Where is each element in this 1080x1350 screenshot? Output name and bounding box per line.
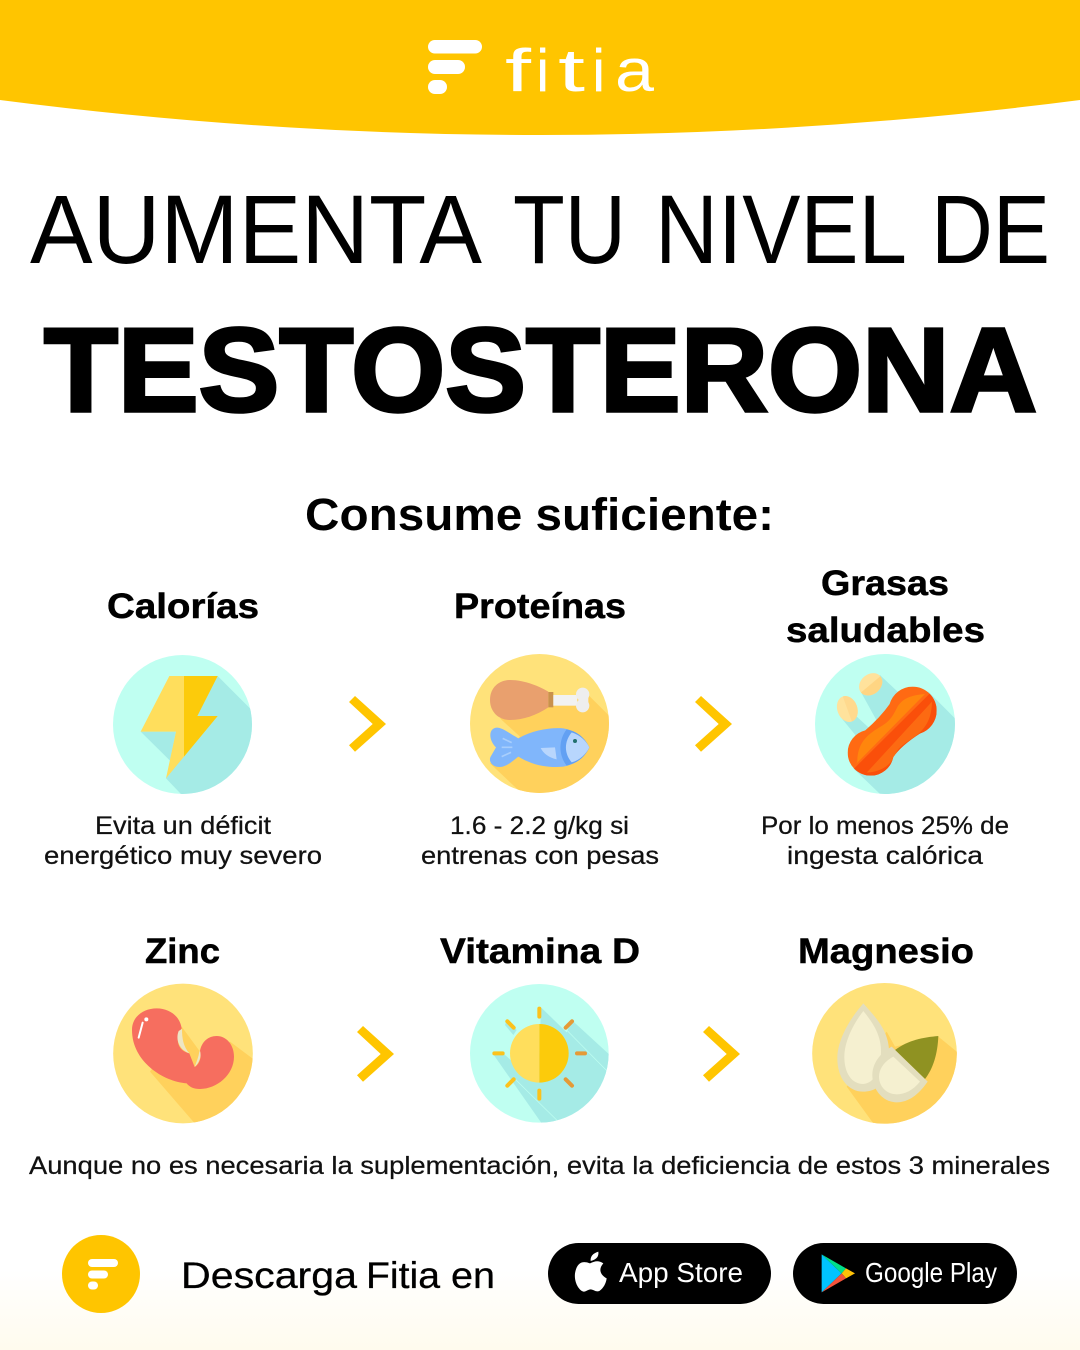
heading: vitamina d: Vitamina D	[440, 932, 640, 971]
download text: Descarga	[181, 1255, 357, 1296]
panel: grasas saludables	[761, 564, 1009, 870]
header banner	[0, 0, 1080, 135]
title line 1	[30, 175, 1050, 284]
drumstick	[490, 680, 589, 720]
heading: grasas saludables: Grasas	[821, 564, 949, 603]
logo wordmark: t	[558, 37, 586, 104]
text: calorias: energético muy severo	[44, 842, 322, 870]
icon: peanut	[815, 654, 955, 794]
title line 1: DE	[931, 175, 1050, 284]
seeds	[833, 669, 887, 725]
download text	[181, 1255, 495, 1296]
app store button	[548, 1243, 771, 1304]
heading: calorias: Calorías	[107, 587, 259, 626]
text: proteinas	[421, 812, 659, 870]
icon: lightning bolt	[113, 655, 252, 794]
note text: Aunque no es necesaria la suplementación, evita la deficiencia de estos 3 minerales	[29, 1152, 1050, 1180]
icon: chicken and fish	[470, 654, 609, 793]
heading: grasas saludables	[786, 564, 985, 650]
title line 1: AUMENTA	[30, 175, 482, 284]
logo wordmark: i	[592, 37, 605, 104]
icon: fitia logo badge	[62, 1235, 140, 1313]
panel: vitamina d	[440, 932, 640, 1132]
google play button	[793, 1243, 1017, 1304]
download text: Fitia	[366, 1255, 440, 1296]
icon: sun	[470, 984, 612, 1132]
text: grasas: ingesta calórica	[787, 842, 983, 870]
panel: magnesio	[798, 932, 974, 1135]
logo wordmark: f	[505, 37, 532, 104]
title line 1: TU	[513, 175, 626, 284]
label: Google Play	[865, 1257, 997, 1288]
text: calorias: Evita un déficit	[95, 812, 271, 840]
icon: play	[822, 1254, 855, 1292]
fish	[490, 728, 589, 767]
panel: proteinas	[421, 587, 659, 870]
panel: zinc	[113, 937, 253, 1124]
text: proteinas: entrenas con pesas	[421, 842, 659, 870]
text: grasas	[761, 812, 1009, 870]
label: App Store	[619, 1257, 743, 1288]
icon: pumpkin seeds	[812, 983, 957, 1124]
arrow	[703, 1026, 740, 1082]
logo wordmark	[505, 37, 655, 104]
text: proteinas: 1.6 - 2.2 g/kg si	[450, 812, 629, 840]
logo wordmark: a	[615, 37, 655, 104]
arrow	[357, 1026, 394, 1082]
text: calorias	[44, 812, 322, 870]
logo wordmark: i	[536, 37, 549, 104]
text: grasas: Por lo menos 25% de	[761, 812, 1009, 840]
subtitle: Consume suficiente:	[305, 489, 774, 540]
panel: calorias	[44, 587, 322, 870]
icon: bean	[113, 984, 257, 1135]
heading: zinc: Zinc	[145, 932, 220, 971]
arrow	[349, 696, 386, 752]
logo mark	[428, 40, 482, 94]
download text: en	[451, 1255, 495, 1296]
heading: grasas saludables: saludables	[786, 611, 985, 650]
title line 1: NIVEL	[655, 175, 907, 284]
arrow	[695, 696, 732, 752]
heading: magnesio: Magnesio	[798, 932, 974, 971]
title line 2: TESTOSTERONA	[44, 304, 1037, 437]
heading: proteinas: Proteínas	[454, 587, 626, 626]
icon: apple	[575, 1252, 607, 1292]
peanut body	[848, 686, 937, 776]
